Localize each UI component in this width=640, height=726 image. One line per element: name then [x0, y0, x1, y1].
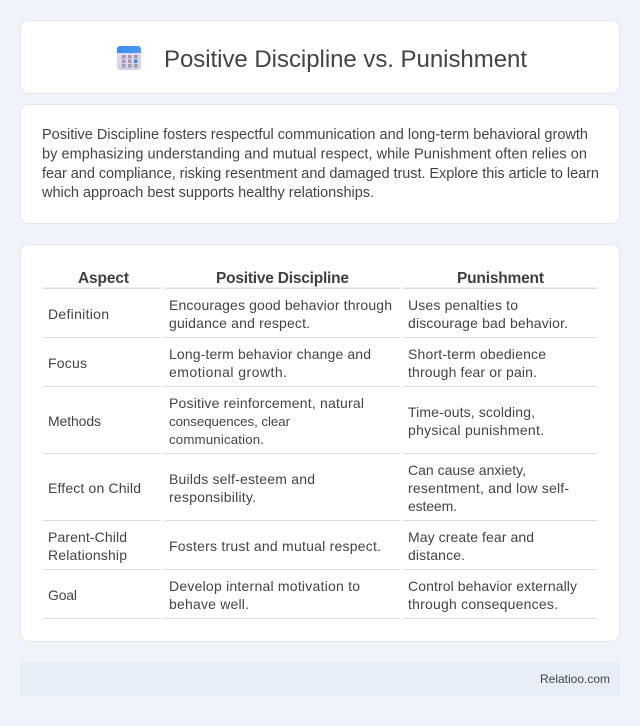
row: Goal: Goal [48, 587, 77, 603]
row: Methods: Time-outs, scolding, [408, 404, 535, 420]
intro text: fear and compliance, risking resentment and damaged trust. Explore this article to learn [42, 166, 599, 182]
row: Parent-Child Relationship: Relationship [48, 547, 127, 563]
row: Focus: Focus [48, 355, 87, 371]
icon: calendar [117, 46, 141, 70]
row: Effect on Child: responsibility. [169, 489, 256, 505]
row: Focus: through fear or pain. [408, 364, 537, 380]
row: Parent-Child Relationship: Fosters trust and mutual respect. [169, 538, 381, 554]
row: Focus: emotional growth. [169, 364, 287, 380]
row: Goal [48, 578, 577, 612]
table header row: Positive Discipline [216, 270, 349, 287]
row: Parent-Child Relationship: May create fear and [408, 529, 534, 545]
row: Methods: Methods [48, 413, 101, 429]
row: Effect on Child: Can cause anxiety, [408, 462, 526, 478]
row: Methods: physical punishment. [408, 422, 544, 438]
row: Methods: communication. [169, 432, 264, 447]
row: Parent-Child Relationship: Parent-Child [48, 529, 127, 545]
row: Methods [48, 395, 544, 447]
row: Effect on Child: Builds self-esteem and [169, 471, 315, 487]
row: Definition: Definition [48, 306, 109, 322]
row: Focus: Long-term behavior change and [169, 346, 371, 362]
row: Goal: through consequences. [408, 596, 558, 612]
row: Definition: discourage bad behavior. [408, 315, 568, 331]
row: Parent-Child Relationship: distance. [408, 547, 465, 563]
row: Definition: Encourages good behavior through [169, 297, 392, 313]
intro text [41, 127, 599, 201]
row: Effect on Child [48, 462, 569, 514]
row: Methods: consequences, clear [169, 414, 291, 429]
row: Definition: guidance and respect. [169, 315, 310, 331]
table header row: Punishment [457, 270, 544, 287]
row: Goal: Develop internal motivation to [169, 578, 360, 594]
panel: comparison table [20, 244, 620, 642]
row: Parent-Child Relationship [48, 529, 534, 563]
row: Definition [48, 297, 568, 331]
intro text: Positive Discipline fosters respectful communication and long-term behavioral growth [42, 127, 588, 143]
table header row [78, 270, 544, 287]
footer bar [20, 662, 620, 696]
intro text: by emphasizing understanding and mutual respect, while Punishment often relies on [42, 146, 587, 162]
row: Definition: Uses penalties to [408, 297, 518, 313]
row: Focus [48, 346, 546, 380]
row: Focus: Short-term obedience [408, 346, 546, 362]
footer credit: Relatioo.com [540, 672, 610, 686]
row: Effect on Child: resentment, and low self- [408, 480, 569, 496]
row: Methods: Positive reinforcement, natural [169, 395, 364, 411]
row: Goal: Control behavior externally [408, 578, 577, 594]
row: Goal: behave well. [169, 596, 249, 612]
table header row: Aspect [78, 270, 129, 287]
row: Effect on Child: esteem. [408, 498, 457, 514]
title: Positive Discipline vs. Punishment [164, 46, 527, 73]
row: Effect on Child: Effect on Child [48, 480, 141, 496]
panel: title header [20, 20, 620, 94]
intro text: which approach best supports healthy relationships. [41, 185, 374, 201]
panel: introduction [20, 104, 620, 224]
